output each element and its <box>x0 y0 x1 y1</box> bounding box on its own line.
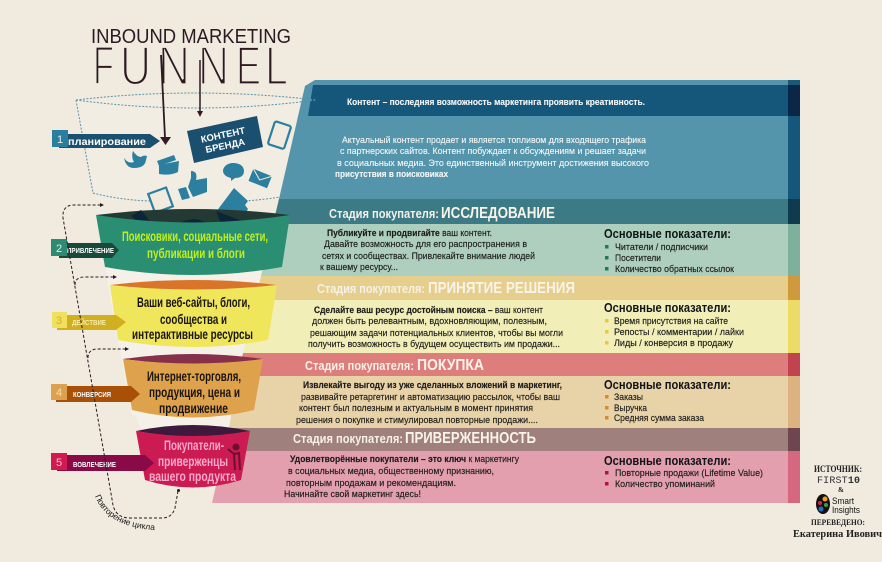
label 4: conversion: 4 <box>56 387 62 399</box>
panel: purchase stage <box>229 353 800 428</box>
funnel: crimson engagement <box>136 425 250 488</box>
logo: Smart Insights: Insights <box>832 505 860 516</box>
intro body: с партнерских сайтов. Контент побуждает к обсуждениям и решает задачи <box>340 146 646 157</box>
key metrics <box>604 377 731 424</box>
credits: & <box>838 486 844 494</box>
credits: ИСТОЧНИК: <box>814 464 862 474</box>
stage description: в социальных медиа, общественному признанию, <box>288 466 494 477</box>
stage heading <box>293 430 536 447</box>
key metrics: Основные показатели: <box>604 300 731 315</box>
stage description: сетях и сообществах. Привлекайте внимание людей <box>322 251 535 262</box>
icon: thumbs up <box>178 171 207 200</box>
stage description: Публикуйте и продвигайте ваш контент. <box>327 228 492 239</box>
funnel: orange conversion: продукция, цена и <box>149 384 240 400</box>
content brand badge: КОНТЕНТ <box>200 126 246 146</box>
dotted funnel top outline <box>76 93 316 201</box>
funnel: yellow action <box>110 280 277 347</box>
stage heading <box>317 280 575 297</box>
stage description: к вашему ресурсу... <box>320 262 398 273</box>
stage description <box>284 454 519 500</box>
logo: Smart Insights <box>816 494 860 516</box>
title: N <box>198 34 229 96</box>
key metrics: Основные показатели: <box>604 226 731 241</box>
label 1: planning <box>52 130 160 148</box>
intro body <box>335 135 649 180</box>
key metrics: Читатели / подписчики <box>615 242 708 253</box>
key metrics: Основные показатели: <box>604 377 731 392</box>
cycle label: Повторение цикла <box>95 494 155 530</box>
icon: speech bubble <box>223 163 244 181</box>
credits <box>793 464 882 540</box>
stage description: контент был полезным и актуальным в момент принятия <box>299 403 533 414</box>
key metrics <box>604 226 735 275</box>
stage heading: ИССЛЕДОВАНИЕ <box>441 205 555 222</box>
key metrics: Повторные продажи (Lifetime Value) <box>615 468 763 479</box>
stage heading: Стадия покупателя: <box>305 359 414 373</box>
stage heading: ПОКУПКА <box>417 357 484 374</box>
title <box>91 26 291 96</box>
stage description: решающим задачи потенциальных клиентов, чтобы вы могли <box>310 328 563 339</box>
stage description: Удовлетворённые покупатели – это ключ к маркетингу <box>290 454 519 465</box>
funnel: yellow action: сообщества и <box>160 311 227 327</box>
arrow: to content brand <box>197 60 203 117</box>
key metrics: Лиды / конверсия в продажу <box>614 338 733 349</box>
icon: folder <box>216 188 248 222</box>
funnel: crimson engagement: приверженцы <box>158 453 228 469</box>
stage description <box>320 228 535 273</box>
icon: twitter bird <box>124 151 147 168</box>
label 4: conversion <box>51 384 140 402</box>
stage heading: ПРИНЯТИЕ РЕШЕНИЯ <box>428 280 575 297</box>
label 1: planning: 1 <box>57 134 63 146</box>
key metrics: Количество упоминаний <box>615 479 715 490</box>
stage description: повторным продажам и рекомендациям. <box>286 478 456 489</box>
stage description: развивайте ретаргетинг и автоматизацию рассылок, чтобы ваш <box>301 392 560 403</box>
funnel: yellow action: Ваши веб-сайты, блоги, <box>137 294 250 310</box>
key metrics: Основные показатели: <box>604 453 731 468</box>
credits: FIRST10 <box>817 476 860 487</box>
funnel: crimson engagement: вашего продукта <box>149 468 236 484</box>
arrow: into funnel <box>160 55 171 145</box>
title: INBOUND MARKETING <box>91 26 291 48</box>
label 2: attraction <box>51 239 119 258</box>
stage description: должен быть релевантным, вдохновляющим, полезным, <box>312 316 547 327</box>
funnel: green attraction <box>96 209 290 275</box>
panel: research stage <box>261 199 800 276</box>
intro body: Актуальный контент продает и является топливом для входящего трафика <box>342 135 647 146</box>
key metrics <box>604 453 763 490</box>
credits: ПЕРЕВЕДЕНО: <box>811 517 865 527</box>
title: F <box>93 34 114 96</box>
stage description: Извлекайте выгоду из уже сделанных вложений в маркетинг, <box>303 380 562 391</box>
stage heading: Стадия покупателя: <box>293 432 403 446</box>
funnel: orange conversion <box>123 354 263 418</box>
panel: decision stage <box>243 276 800 353</box>
funnel: green attraction: публикации и блоги <box>147 245 245 261</box>
key metrics: Средняя сумма заказа <box>614 413 705 424</box>
stage heading: ПРИВЕРЖЕННОСТЬ <box>405 430 536 447</box>
label 5: engagement <box>51 453 154 471</box>
icon: photo frame <box>148 188 173 213</box>
key metrics: Время присутствия на сайте <box>614 316 728 327</box>
funnel: orange conversion: Интернет-торговля, <box>147 368 241 384</box>
funnel: green attraction: Поисковики, социальные сети, <box>122 228 268 244</box>
key metrics: Заказы <box>614 392 643 403</box>
content brand badge: БРЕНДА <box>205 137 246 156</box>
stage description: Давайте возможность для его распространения в <box>324 239 527 250</box>
intro headline: Контент – последняя возможность маркетинга проявить креативность. <box>347 97 645 108</box>
content brand badge <box>187 116 263 163</box>
icon: envelope <box>248 169 272 188</box>
label 2: attraction: 2 <box>56 243 62 255</box>
funnel: yellow action: интерактивные ресурсы <box>132 326 253 342</box>
stage heading: Стадия покупателя: <box>317 282 425 296</box>
stage description: решения о покупке и стимулировал повторные продажи.... <box>296 415 538 426</box>
panel: content intro <box>279 80 800 199</box>
label 5: engagement: ВОВЛЕЧЕНИЕ <box>73 462 116 469</box>
label 3: action: ДЕЙСТВИЕ <box>72 318 106 327</box>
key metrics: Выручка <box>614 403 648 414</box>
stage description <box>308 305 563 350</box>
intro body: в социальных медиа. Это единственный инструмент достижения высокого <box>337 158 649 169</box>
title: L <box>265 34 288 96</box>
stage description: Начинайте свой маркетинг здесь! <box>284 489 421 500</box>
key metrics: Количество обратных ссылок <box>615 264 735 275</box>
key metrics: Репосты / комментарии / лайки <box>614 327 744 338</box>
icon: person <box>228 444 240 470</box>
stage description: получить возможность в будущем осуществить им продажи... <box>308 339 560 350</box>
label 1: planning: планирование <box>68 136 146 148</box>
stage description <box>296 380 562 426</box>
logo: Smart Insights: Smart <box>832 496 854 507</box>
funnel: crimson engagement: Покупатели- <box>164 437 224 453</box>
intro body: присутствия в поисковиках <box>335 169 449 180</box>
dashed cycle arrow <box>63 203 180 518</box>
label 4: conversion: КОНВЕРСИЯ <box>73 392 111 399</box>
title: N <box>158 34 190 96</box>
key metrics: Посетители <box>615 253 661 264</box>
icon: tablet <box>268 121 291 149</box>
icon: clapperboard <box>157 155 179 175</box>
title: E <box>236 34 261 96</box>
key metrics <box>604 300 744 349</box>
funnel: orange conversion: продвижение <box>159 400 228 416</box>
label 3: action <box>52 312 126 330</box>
panel: loyalty stage <box>212 428 800 503</box>
stage heading <box>305 357 484 374</box>
label 3: action: 3 <box>56 315 62 327</box>
stage heading: Стадия покупателя: <box>329 207 439 221</box>
stage heading <box>329 205 555 222</box>
stage description: Сделайте ваш ресурс достойным поиска – ваш контент <box>314 305 544 316</box>
label 5: engagement: 5 <box>56 457 62 469</box>
label 2: attraction: ПРИВЛЕЧЕНИЕ <box>67 248 114 255</box>
title: U <box>120 34 151 96</box>
